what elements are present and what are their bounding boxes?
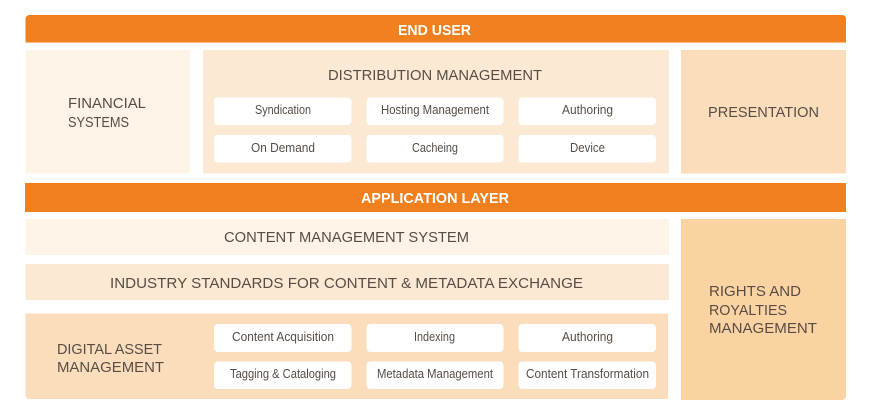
card: cacheing: Cacheing bbox=[412, 141, 458, 155]
card: metadata management bbox=[366, 362, 504, 389]
panel: presentation: PRESENTATION bbox=[708, 104, 819, 121]
card: tagging and cataloging bbox=[214, 362, 352, 389]
heading: digital asset management: MANAGEMENT bbox=[57, 359, 164, 376]
panel: financial systems bbox=[26, 50, 190, 174]
card: syndication: Syndication bbox=[255, 103, 311, 117]
card: device bbox=[518, 135, 656, 162]
card: content acquisition: Content Acquisition bbox=[232, 330, 334, 344]
heading: distribution management: DISTRIBUTION MANAGEMENT bbox=[328, 67, 542, 84]
panel: presentation bbox=[681, 50, 846, 174]
card: metadata management: Metadata Management bbox=[377, 367, 493, 381]
card: hosting management: Hosting Management bbox=[381, 103, 489, 117]
card: tagging and cataloging: Tagging & Cataloging bbox=[230, 367, 336, 381]
band: application layer bbox=[25, 183, 846, 212]
panel: distribution management bbox=[203, 50, 669, 174]
panel: financial systems: SYSTEMS bbox=[68, 114, 129, 131]
card: authoring bbox=[518, 98, 656, 125]
card: on demand: On Demand bbox=[251, 141, 315, 155]
band: end user bbox=[26, 15, 846, 42]
card: syndication bbox=[214, 98, 352, 125]
card: indexing bbox=[366, 324, 504, 352]
panel: digital asset management bbox=[26, 314, 668, 399]
card: on demand bbox=[214, 135, 352, 162]
panel: rights and royalties management: RIGHTS AND bbox=[709, 283, 801, 300]
panel: rights and royalties management bbox=[681, 219, 846, 400]
card: authoring bbox=[518, 324, 656, 352]
card: authoring: Authoring bbox=[562, 103, 613, 117]
card: content transformation bbox=[518, 362, 656, 389]
heading: digital asset management: DIGITAL ASSET bbox=[57, 341, 162, 358]
card: authoring: Authoring bbox=[562, 330, 613, 344]
heading: digital asset management bbox=[57, 341, 164, 376]
panel: industry standards bbox=[26, 264, 669, 300]
band: application layer: APPLICATION LAYER bbox=[361, 191, 510, 207]
panel: industry standards: INDUSTRY STANDARDS FOR CONTENT & METADATA EXCHANGE bbox=[110, 275, 583, 292]
card: cacheing bbox=[366, 135, 504, 162]
card: content transformation: Content Transformation bbox=[526, 367, 649, 381]
panel: content management system: CONTENT MANAGEMENT SYSTEM bbox=[224, 229, 469, 246]
card: indexing: Indexing bbox=[414, 330, 455, 344]
card: content acquisition bbox=[214, 324, 352, 352]
card: hosting management bbox=[366, 98, 504, 125]
panel: rights and royalties management: ROYALTIES bbox=[709, 302, 787, 319]
card: device: Device bbox=[570, 141, 605, 155]
panel: financial systems: FINANCIAL bbox=[68, 95, 146, 112]
panel: content management system bbox=[26, 219, 669, 255]
panel: rights and royalties management: MANAGEMENT bbox=[709, 320, 817, 337]
band: end user: END USER bbox=[398, 23, 472, 39]
